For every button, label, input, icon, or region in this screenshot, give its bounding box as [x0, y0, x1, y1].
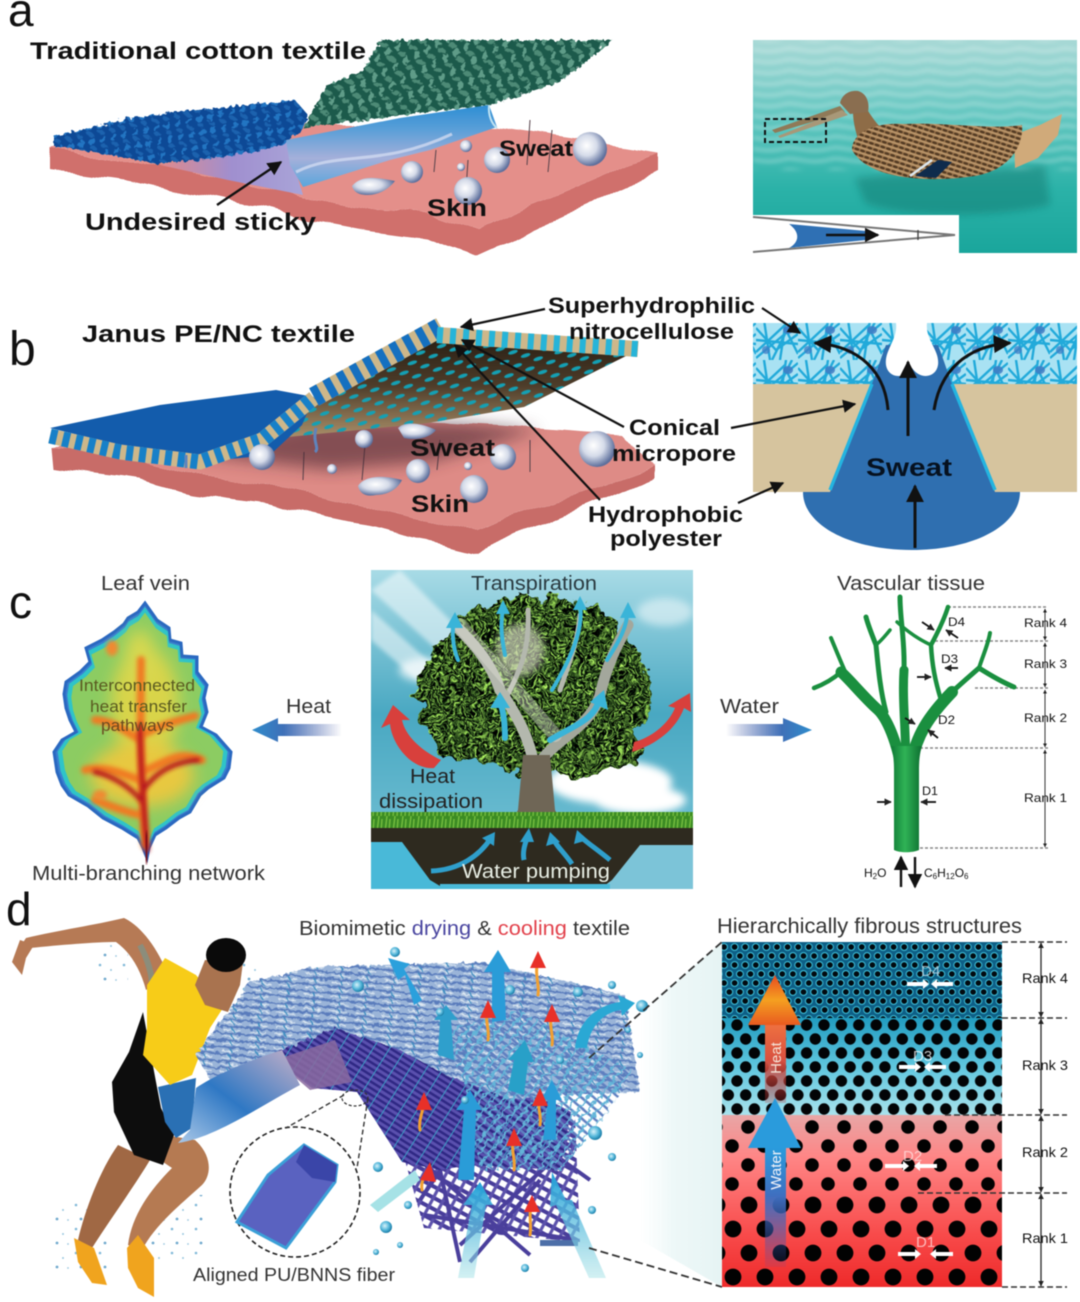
formulae	[864, 866, 969, 881]
sweat specks	[55, 945, 265, 1270]
raised stripes edge	[314, 327, 638, 397]
panel c label: c	[9, 576, 32, 628]
leaf outline	[54, 603, 231, 858]
main trunk	[891, 746, 922, 852]
label: conical micropore: micropore	[612, 441, 736, 466]
rank vertical arrows c	[1044, 609, 1046, 847]
heading: biomimetic textile: Biomimetic drying & cooling textile	[299, 918, 630, 940]
label: conical micropore	[612, 415, 736, 466]
rank labels: Rank 2	[1022, 1144, 1068, 1160]
arrow: water to vessel	[720, 696, 812, 742]
formulae: O	[955, 866, 964, 880]
branches	[814, 597, 1014, 770]
formulae: 12	[946, 872, 955, 881]
arrow: heat to leaf: Heat	[286, 696, 331, 718]
rank dashes c	[905, 607, 1048, 848]
formulae: H	[937, 866, 946, 880]
sky	[371, 570, 693, 889]
rank 2 and 1	[722, 1115, 1002, 1287]
D labels	[903, 963, 940, 1251]
rank scale	[918, 942, 1068, 1287]
trunk	[506, 755, 566, 830]
grass	[371, 812, 693, 829]
formulae: O	[877, 866, 886, 880]
rank dashes	[918, 942, 1067, 1287]
blue swoosh from body	[178, 1050, 300, 1143]
leaf text: pathways	[101, 716, 174, 735]
small labels: D2	[938, 713, 955, 727]
leaf text	[79, 676, 195, 735]
formulae: 6	[933, 872, 938, 881]
red heat arrows	[381, 693, 691, 768]
rank labels: Rank 1	[1022, 1230, 1068, 1246]
dense purple arch	[268, 1025, 571, 1170]
heat arrow: Heat	[768, 1041, 785, 1074]
shadow under textile	[200, 420, 540, 470]
small labels: Rank 3	[1024, 657, 1067, 671]
D labels: D2	[903, 1148, 922, 1165]
blue water droplets	[352, 947, 648, 1272]
rank 3	[722, 1018, 1002, 1115]
heading: traditional cotton: Traditional cotton textile	[30, 38, 366, 65]
runner	[12, 918, 265, 1297]
arrow: undesired sticky	[217, 162, 281, 205]
rank labels	[1022, 970, 1068, 1246]
droplets b	[186, 424, 615, 503]
formulae: H	[864, 866, 873, 880]
sticky film	[286, 105, 497, 187]
green knit textile	[303, 40, 613, 128]
red heat arrowheads	[416, 951, 560, 1212]
back leg	[78, 1145, 150, 1248]
small labels: D4	[948, 615, 965, 629]
reflection	[855, 165, 1050, 215]
transport arrows	[901, 857, 915, 887]
heading: vascular tissue: Vascular tissue	[837, 573, 985, 595]
zoom lines	[286, 1095, 368, 1168]
ripples	[753, 40, 1077, 170]
D labels: D1	[916, 1234, 935, 1251]
panel d label: d	[6, 883, 32, 935]
flow arrows	[815, 343, 1010, 548]
label: skin b: Skin	[411, 491, 469, 518]
tree labels: Water pumping	[462, 861, 610, 883]
heat blobs	[90, 630, 194, 807]
fiber end	[296, 1145, 337, 1182]
panel b label: b	[9, 323, 36, 376]
left stripes edge	[50, 398, 314, 462]
D labels: D4	[921, 963, 940, 980]
small labels: Rank 1	[1024, 791, 1067, 805]
label: sweat a: Sweat	[499, 136, 574, 161]
panel: tree picture	[371, 570, 693, 889]
heading: leaf vein: Leaf vein	[101, 573, 190, 595]
front leg	[128, 1135, 209, 1250]
water background	[753, 40, 1077, 253]
label: sweat in pore: Sweat	[866, 454, 953, 482]
tree labels: Heat	[410, 766, 455, 788]
rank 4	[722, 942, 1002, 1018]
D labels: D3	[913, 1048, 932, 1065]
panel: duck photo	[753, 40, 1077, 253]
polyester layer	[753, 384, 1077, 492]
label: hydrophobic polyester: polyester	[610, 526, 722, 551]
blue top layer	[50, 390, 314, 462]
rank arrows	[1040, 943, 1042, 1286]
canopy light	[496, 624, 544, 676]
inset: bill cross-section	[753, 215, 959, 253]
centre fibre spray	[440, 1010, 632, 1170]
sunrays	[371, 570, 480, 700]
label: skin a: Skin	[427, 195, 487, 222]
sweat droplets	[352, 132, 607, 205]
water arrow	[748, 1098, 801, 1267]
cyan transpiration arrows	[453, 605, 627, 740]
cyan flow arrows	[370, 950, 635, 1278]
woven textile	[178, 947, 648, 1278]
heading: Janus: Janus PE/NC textile	[82, 321, 355, 348]
vascular tissue tree	[814, 597, 1067, 887]
label: hydrophobic polyester: Hydrophobic	[588, 502, 743, 527]
white neck	[886, 323, 938, 376]
veins	[85, 640, 202, 860]
diameter arrows	[885, 984, 953, 1254]
duck	[772, 91, 1062, 179]
panel: a cotton textile on skin	[52, 40, 658, 255]
film: lilac sweat under textile	[160, 140, 303, 195]
label: multi-branching: Multi-branching network	[32, 863, 266, 885]
arm	[12, 918, 168, 990]
canopy	[417, 596, 653, 776]
zoom origin	[342, 1090, 368, 1106]
diameter heads	[903, 979, 937, 1259]
sweat-filled pore	[803, 345, 1020, 550]
zoom wedge	[640, 942, 722, 1287]
tree labels: dissipation	[379, 791, 483, 813]
dashed box	[765, 119, 826, 142]
zoom lines to panel	[589, 942, 722, 1287]
groundwater	[371, 842, 693, 889]
label: superhydrophilic nitrocellulose: nitrocellulose	[569, 319, 734, 344]
heading: hierarchically fibrous: Hierarchically fibrous structures	[717, 915, 1022, 938]
cyan arrowheads	[446, 596, 636, 710]
blue shorts panel	[158, 1078, 196, 1138]
skin slab b	[52, 415, 652, 552]
fiber body	[237, 1145, 337, 1248]
label: fiber: Aligned PU/BNNS fiber	[193, 1265, 395, 1285]
rank labels: Rank 3	[1022, 1057, 1068, 1073]
blue knit textile	[54, 100, 308, 164]
label: conical micropore: Conical	[629, 415, 720, 440]
mesh extra fibres	[420, 1120, 590, 1262]
mauve underside	[275, 1040, 352, 1090]
leaf heat map	[54, 603, 231, 860]
small labels: D3	[941, 652, 958, 666]
formulae: 2	[873, 872, 878, 881]
clouds	[399, 598, 693, 814]
small labels: Rank 4	[1024, 616, 1067, 630]
label: superhydrophilic nitrocellulose: Superhydrophilic	[548, 293, 755, 318]
small labels: D1	[922, 784, 938, 798]
label: sweat b: Sweat	[410, 435, 495, 462]
pore cyan edges	[830, 384, 995, 490]
nitrocellulose layer	[753, 323, 1077, 384]
root water arrows	[431, 835, 610, 871]
panel: b Janus textile on skin	[50, 327, 652, 552]
label: superhydrophilic nitrocellulose	[548, 293, 755, 344]
textile underside with pores	[200, 330, 638, 453]
panel: hierarchical structure	[722, 942, 1002, 1287]
skin slab a	[52, 120, 658, 255]
upper light fibres	[196, 962, 640, 1102]
leaf text: heat transfer	[90, 697, 187, 716]
heat arrow	[748, 975, 801, 1103]
diameter arrows	[877, 622, 958, 802]
yellow shirt	[143, 958, 223, 1085]
tree labels: Transpiration	[471, 573, 597, 595]
leaders b	[455, 308, 855, 503]
formulae: C	[924, 866, 933, 880]
panel: pore diagram	[753, 323, 1077, 550]
lower open mesh	[402, 1115, 580, 1242]
rank labels: Rank 4	[1022, 970, 1068, 986]
shoes	[74, 1235, 154, 1297]
formulae: 6	[964, 872, 969, 881]
label: undesired sticky: Undesired sticky	[85, 209, 317, 236]
arrow: water to vessel: Water	[720, 696, 779, 718]
label: hydrophobic polyester	[588, 502, 743, 551]
root arrowheads	[482, 828, 588, 846]
red heat arrows	[420, 960, 552, 1235]
small labels: Rank 2	[1024, 711, 1067, 725]
head	[195, 938, 246, 1012]
tree labels	[379, 573, 610, 883]
leaf text: Interconnected	[79, 676, 195, 695]
magnifier: aligned fiber	[230, 1090, 368, 1257]
branches	[455, 610, 628, 770]
shorts	[112, 1012, 174, 1165]
arrow: heat to leaf	[252, 696, 342, 742]
soil	[371, 828, 693, 889]
small labels	[922, 615, 1067, 805]
water arrow: Water	[768, 1150, 785, 1190]
stub fibre	[540, 1240, 578, 1246]
